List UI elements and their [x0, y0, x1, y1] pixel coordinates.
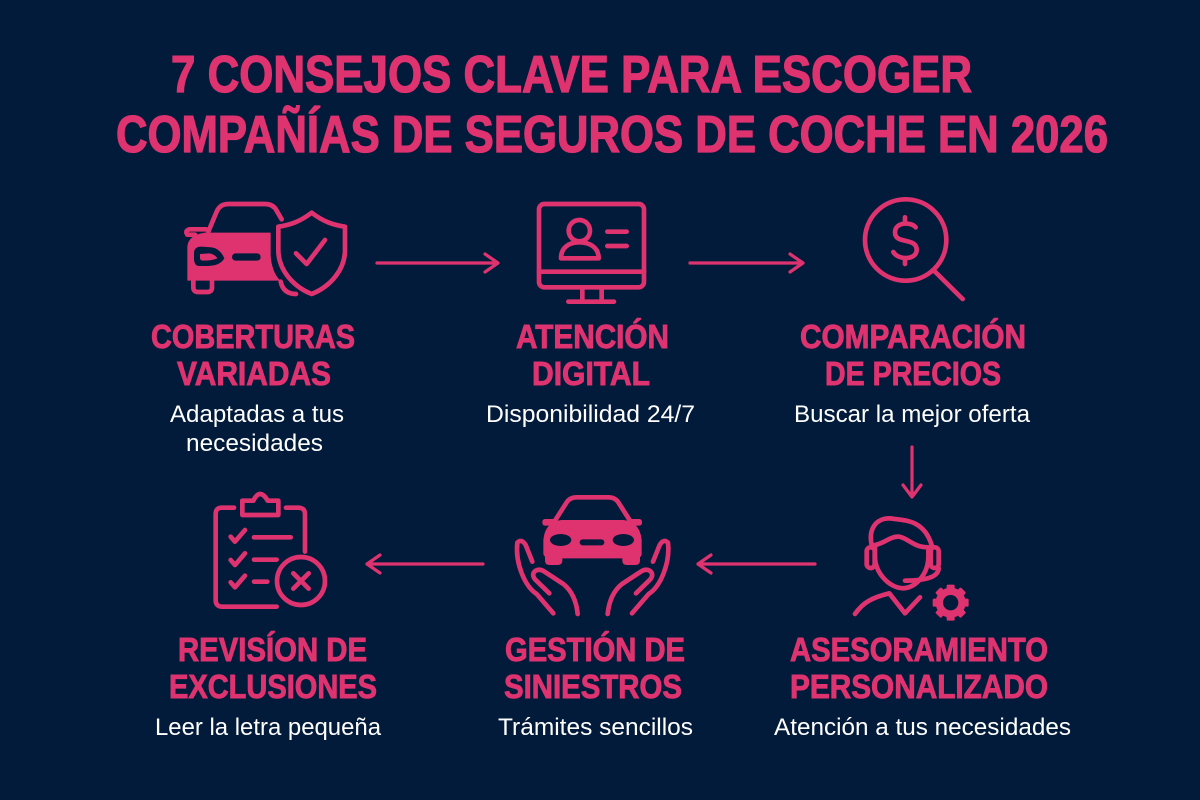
icon: agent with headset and gear: [855, 518, 969, 621]
step: comparacion de precios: COMPARACIÓN: [800, 318, 1026, 356]
arrow: comparacion to asesoramiento: [903, 447, 921, 497]
step: asesoramiento personalizado: [774, 632, 1071, 741]
step: atencion digital: ATENCIÓN: [516, 318, 669, 356]
step: asesoramiento personalizado: ASESORAMIENTO: [790, 632, 1048, 669]
arrow: coberturas to atencion: [377, 254, 498, 272]
step: atencion digital: DIGITAL: [532, 356, 650, 393]
title: [116, 46, 1108, 164]
step: asesoramiento personalizado: Atención a tus necesidades: [774, 714, 1071, 741]
step: gestion de siniestros: Trámites sencillos: [498, 714, 693, 741]
arrow: asesoramiento to gestion: [698, 555, 815, 573]
step: coberturas variadas: COBERTURAS: [151, 319, 355, 356]
step: coberturas variadas: necesidades: [186, 430, 323, 457]
step: coberturas variadas: Adaptadas a tus: [170, 401, 344, 428]
icon: clipboard checklist with X: [216, 494, 325, 607]
step: revision de exclusiones: [155, 631, 381, 741]
icon: monitor with user profile: [539, 204, 644, 302]
step: comparacion de precios: [794, 318, 1030, 428]
step: coberturas variadas: [151, 319, 355, 457]
step: atencion digital: [486, 318, 695, 428]
icon: car with shield: [186, 204, 350, 297]
step: gestion de siniestros: [498, 631, 693, 741]
step: revision de exclusiones: EXCLUSIONES: [169, 669, 377, 706]
icon: car held by hands: [517, 497, 668, 614]
step: gestion de siniestros: SINIESTROS: [504, 669, 682, 706]
step: atencion digital: Disponibilidad 24/7: [486, 401, 695, 428]
step: gestion de siniestros: GESTIÓN DE: [505, 631, 685, 669]
step: revision de exclusiones: REVISÍON DE: [178, 631, 367, 669]
title: 7 CONSEJOS CLAVE PARA ESCOGER: [171, 46, 972, 104]
step: comparacion de precios: Buscar la mejor oferta: [794, 401, 1030, 428]
arrow: gestion to revision: [367, 555, 483, 573]
step: coberturas variadas: VARIADAS: [177, 356, 331, 393]
step: revision de exclusiones: Leer la letra pequeña: [155, 714, 381, 741]
icon: magnifier with dollar: [865, 199, 963, 299]
step: comparacion de precios: DE PRECIOS: [825, 356, 1001, 393]
arrow: atencion to comparacion: [690, 254, 803, 272]
step: asesoramiento personalizado: PERSONALIZADO: [790, 669, 1048, 706]
